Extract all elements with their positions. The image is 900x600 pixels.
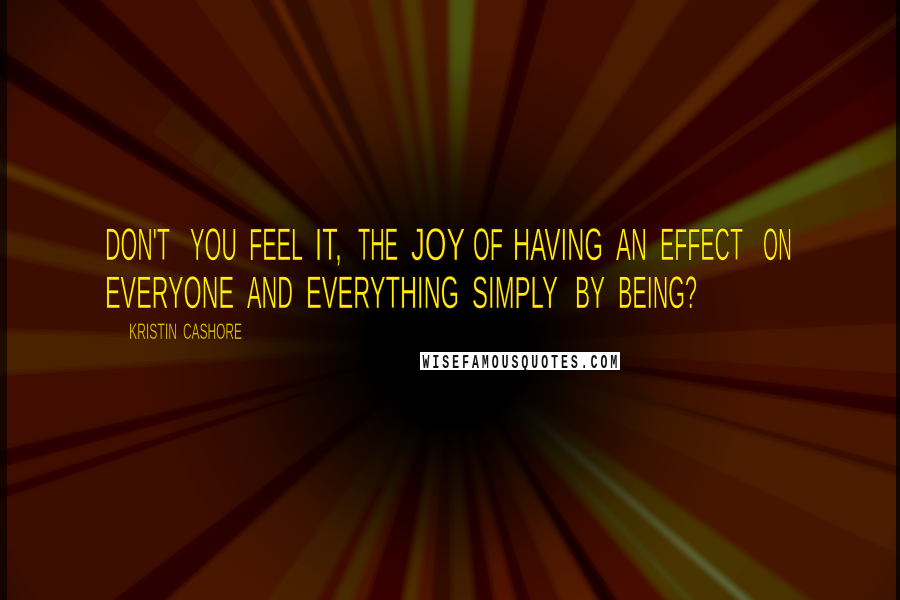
quote line 1: OF — [473, 219, 503, 270]
quote line 2: BY — [575, 267, 605, 318]
quote line 1: YOU — [190, 219, 237, 270]
quote line 1: EFFECT — [660, 219, 743, 270]
quote line 1: FEEL — [249, 219, 303, 270]
quote line 1: AN — [616, 219, 647, 270]
watermark: wisefamousquotes.com: WISEFAMOUSQUOTES.COM — [422, 352, 620, 374]
quote line 2 — [105, 267, 697, 318]
quote text — [105, 219, 792, 318]
author attribution: KRISTIN — [129, 319, 177, 344]
quote line 2: AND — [247, 267, 293, 318]
quote line 1: JOY — [411, 219, 465, 270]
olive overlays — [0, 0, 450, 345]
quote line 2: SIMPLY — [472, 267, 558, 318]
quote line 2: EVERYTHING — [306, 267, 459, 318]
quote line 1: THE — [358, 219, 398, 270]
quote text: BEING? — [618, 267, 697, 318]
quote line 2: EVERYONE — [105, 267, 234, 318]
quote line 1: DON'T — [105, 219, 170, 270]
text: ON — [763, 219, 792, 270]
author attribution: CASHORE — [183, 319, 242, 344]
quote line 1 — [105, 219, 792, 270]
quote line 1: HAVING — [513, 219, 603, 270]
quote line 1: IT, — [315, 219, 342, 270]
